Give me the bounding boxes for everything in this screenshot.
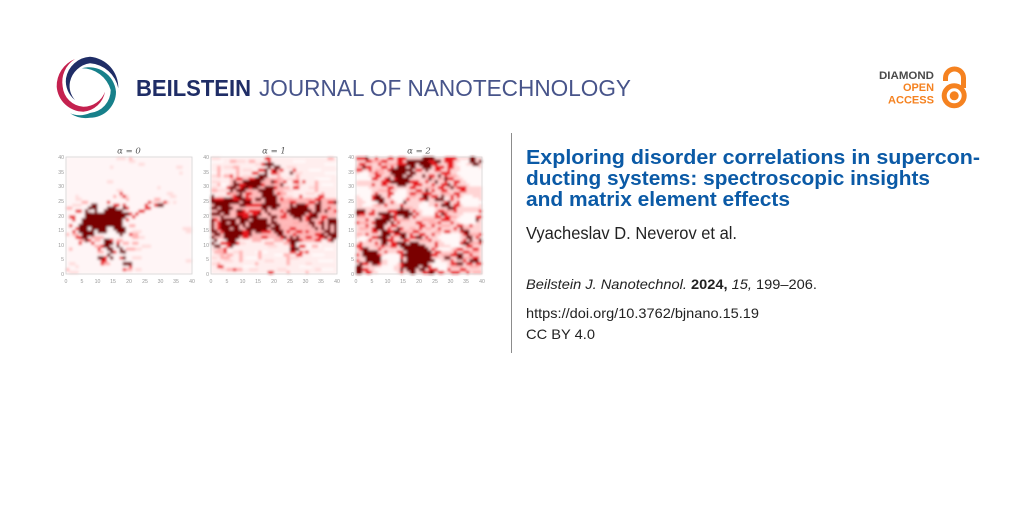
- authors: Vyacheslav D. Neverov et al.: [526, 223, 737, 243]
- badge: Diamond Open Access: [879, 69, 964, 106]
- frame and axis labels alpha 0: 40: [189, 279, 195, 285]
- journal name: JOURNAL OF NANOTECHNOLOGY: [259, 75, 631, 101]
- frame and axis labels alpha 2: α = 2: [407, 146, 431, 156]
- frame and axis labels alpha 0: 30: [58, 184, 64, 190]
- frame and axis labels alpha 2: 25: [348, 199, 354, 205]
- frame and axis labels alpha 0: 0: [61, 272, 64, 278]
- frame and axis labels alpha 2: 0: [355, 279, 358, 285]
- frame and axis labels alpha 2: 10: [385, 279, 390, 285]
- frame and axis labels alpha 2: 10: [348, 243, 354, 249]
- frame and axis labels alpha 1: 35: [318, 279, 324, 285]
- frame and axis labels alpha 0: 35: [58, 170, 64, 176]
- frame and axis labels alpha 0: 5: [61, 257, 64, 263]
- frame and axis labels alpha 0: 25: [58, 199, 64, 205]
- frame and axis labels alpha 0: 10: [58, 243, 64, 249]
- article title: and matrix element effects: [526, 188, 790, 211]
- badge: Diamond Open Access: DIAMOND: [879, 70, 934, 82]
- frame and axis labels alpha 1: [203, 146, 340, 285]
- frame and axis labels alpha 0: 20: [126, 279, 132, 285]
- article title: ducting systems: spectroscopic insights: [526, 167, 930, 190]
- frame and axis labels alpha 2: 0: [351, 272, 354, 278]
- frame and axis labels alpha 2: 5: [371, 279, 374, 285]
- frame and axis labels alpha 2: 20: [416, 279, 422, 285]
- frame and axis labels alpha 0: 10: [95, 279, 100, 285]
- frame and axis labels alpha 1: 25: [203, 199, 209, 205]
- logo: Beilstein swirl: [57, 57, 118, 118]
- journal name: BEILSTEIN: [136, 75, 251, 101]
- license: CC BY 4.0: [526, 326, 595, 342]
- frame and axis labels alpha 1: 30: [303, 279, 308, 285]
- frame and axis labels alpha 2: 35: [348, 170, 354, 176]
- frame and axis labels alpha 1: 20: [203, 214, 209, 220]
- frame and axis labels alpha 2: 30: [448, 279, 453, 285]
- frame and axis labels alpha 0: 5: [81, 279, 84, 285]
- frame and axis labels alpha 2: 15: [348, 228, 354, 234]
- frame and axis labels alpha 1: 0: [210, 279, 213, 285]
- article title: [526, 146, 980, 211]
- frame and axis labels alpha 1: 5: [226, 279, 229, 285]
- heatmap cells alpha 1: [209, 154, 339, 276]
- heatmap panel: alpha = 2: [348, 146, 485, 285]
- frame and axis labels alpha 1: 10: [240, 279, 245, 285]
- badge: Diamond Open Access: ACCESS: [888, 94, 934, 106]
- frame and axis labels alpha 0: 20: [58, 214, 64, 220]
- heatmap panel: alpha = 0: [58, 146, 195, 285]
- frame and axis labels alpha 1: 5: [206, 257, 209, 263]
- frame and axis labels alpha 0: 0: [65, 279, 68, 285]
- frame and axis labels alpha 0: [58, 146, 195, 285]
- article title: Exploring disorder correlations in supercon-: [526, 146, 980, 169]
- frame and axis labels alpha 0: 15: [58, 228, 64, 234]
- frame and axis labels alpha 1: 10: [203, 243, 209, 249]
- frame and axis labels alpha 0: 35: [173, 279, 179, 285]
- frame and axis labels alpha 2: 35: [463, 279, 469, 285]
- frame and axis labels alpha 1: 40: [334, 279, 340, 285]
- doi: https://doi.org/10.3762/bjnano.15.19: [526, 305, 759, 321]
- frame and axis labels alpha 1: 15: [255, 279, 261, 285]
- divider: [511, 133, 512, 353]
- heatmap cells alpha 0: [64, 156, 193, 275]
- badge: Diamond Open Access: OPEN: [903, 82, 934, 94]
- frame and axis labels alpha 2: 25: [432, 279, 438, 285]
- frame and axis labels alpha 2: 40: [479, 279, 485, 285]
- frame and axis labels alpha 1: 25: [287, 279, 293, 285]
- frame and axis labels alpha 0: 15: [110, 279, 116, 285]
- frame and axis labels alpha 1: 40: [203, 155, 209, 161]
- frame and axis labels alpha 0: 40: [58, 155, 64, 161]
- frame and axis labels alpha 2: 30: [348, 184, 354, 190]
- frame and axis labels alpha 1: 30: [203, 184, 209, 190]
- frame and axis labels alpha 2: 20: [348, 214, 354, 220]
- frame and axis labels alpha 0: α = 0: [117, 146, 141, 156]
- heatmap panel: alpha = 1: [203, 146, 340, 285]
- frame and axis labels alpha 0: 30: [158, 279, 163, 285]
- frame and axis labels alpha 1: 15: [203, 228, 209, 234]
- frame and axis labels alpha 1: 20: [271, 279, 277, 285]
- frame and axis labels alpha 1: α = 1: [262, 146, 286, 156]
- frame and axis labels alpha 2: 5: [351, 257, 354, 263]
- frame and axis labels alpha 0: 25: [142, 279, 148, 285]
- heatmap cells alpha 2: [354, 154, 484, 276]
- underlay in dense zone: [211, 177, 337, 239]
- frame and axis labels alpha 1: 0: [206, 272, 209, 278]
- frame and axis labels alpha 2: 15: [400, 279, 406, 285]
- citation: Beilstein J. Nanotechnol. 2024, 15, 199–206.: [526, 276, 817, 292]
- frame and axis labels alpha 1: 35: [203, 170, 209, 176]
- frame and axis labels alpha 2: [348, 146, 485, 285]
- frame and axis labels alpha 2: 40: [348, 155, 354, 161]
